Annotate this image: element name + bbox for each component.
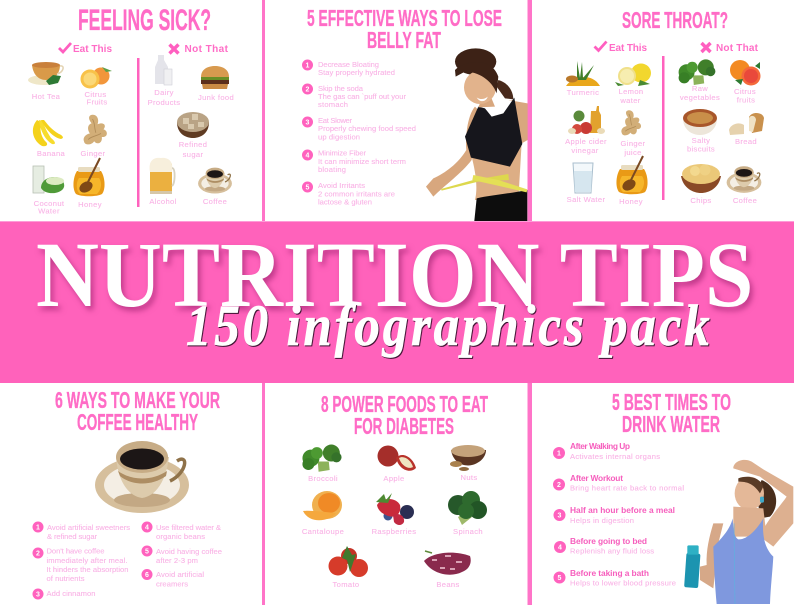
food: raw vegetables: vegetables — [680, 93, 720, 102]
food: alcohol — [149, 158, 177, 206]
list item 5 — [302, 181, 395, 206]
food: citrus fruits — [80, 67, 112, 106]
food: alcohol: Alcohol — [149, 197, 177, 206]
food: honey: Honey — [78, 200, 102, 209]
food: ginger juice: Ginger — [621, 139, 645, 148]
icon: turmeric — [566, 61, 600, 86]
icon: berries — [376, 493, 414, 525]
food: tomato — [328, 546, 368, 589]
icon: apple — [378, 446, 416, 471]
list item 3: Add cinnamon — [46, 589, 96, 598]
list item 2: 2 — [306, 86, 310, 94]
food: banana — [33, 120, 66, 158]
list item 4: Before going to bed — [570, 536, 647, 546]
food: apple — [378, 446, 416, 483]
heading line 1: 5 EFFECTIVE WAYS TO LOSE — [307, 5, 502, 31]
food: broccoli — [302, 445, 342, 483]
list item 5: after 2-3 pm — [156, 556, 198, 565]
food: chips — [681, 164, 721, 205]
panel: belly fat — [265, 0, 530, 222]
food: honey: Honey — [619, 197, 643, 206]
food: salt water — [567, 163, 605, 204]
food: salty biscuits — [683, 109, 717, 154]
list item 2: 2 — [557, 482, 561, 489]
food: salty biscuits: Salty — [692, 136, 710, 145]
icon: bread — [729, 113, 764, 135]
list item 3: up digestion — [318, 132, 360, 142]
list item 3: 3 — [36, 592, 40, 598]
list item 1: 1 — [306, 62, 310, 70]
heading: FEELING SICK? — [78, 4, 211, 37]
list item 1: 1 — [557, 450, 561, 458]
heading line 2: FOR DIABETES — [354, 413, 454, 439]
food: apple: Apple — [383, 474, 405, 483]
list item 3 — [554, 505, 675, 525]
food: nuts — [450, 445, 486, 482]
food: coffee: Coffee — [733, 196, 757, 205]
icon: cantaloupe — [303, 491, 342, 520]
list item 1: Decrease Bloating — [318, 60, 379, 69]
photo: coffee cup on saucer — [95, 441, 189, 513]
list item 1 — [302, 60, 395, 77]
panel: sore throat — [530, 0, 794, 222]
list item 4: It can minimize short term — [318, 157, 406, 166]
list item 1: Avoid artificial sweetners — [47, 523, 130, 532]
list item 3: Helps in digestion — [570, 516, 634, 525]
list item 5: Avoid having coffee — [156, 547, 222, 556]
list item 6 — [142, 569, 204, 588]
heading line 1: 6 WAYS TO MAKE YOUR — [55, 387, 220, 413]
icon: spinach — [448, 491, 487, 525]
list item 2: Bring heart rate back to normal — [570, 484, 684, 492]
panel: coffee healthy — [0, 383, 265, 605]
food: apple cider vinegar: vinegar — [571, 146, 599, 155]
list item 6: Avoid artificial — [156, 570, 204, 579]
icon: honey jar — [616, 156, 648, 194]
heading line 2: BELLY FAT — [367, 27, 441, 53]
icon: tomatoes — [328, 546, 368, 577]
food: citrus fruits — [730, 60, 760, 104]
list item 6: creamers — [156, 580, 188, 588]
heading line 2: DRINK WATER — [622, 411, 720, 437]
list item 2: stomach — [318, 100, 348, 109]
list item 3: Eat Slower — [318, 116, 352, 125]
column heading: not that: Not That — [716, 43, 759, 54]
food: bread: Bread — [735, 137, 757, 146]
icon: grapefruit and orange — [730, 60, 760, 86]
list item 5: Avoid Irritants — [318, 181, 365, 190]
list item 4: 4 — [306, 152, 310, 160]
list item 5 — [554, 568, 676, 588]
food: broccoli: Broccoli — [308, 474, 338, 483]
food: lemon water: Lemon — [619, 87, 643, 96]
list item 4 — [302, 148, 406, 174]
food: beans — [424, 551, 471, 589]
icon: coffee cup — [727, 166, 761, 193]
food: citrus fruits: Fruits — [86, 98, 108, 106]
list item 5: 2 common irritants are — [318, 190, 395, 198]
panel: drink water — [530, 383, 794, 605]
icon: chips bowl — [681, 164, 721, 193]
food: hot tea — [28, 62, 63, 101]
list item 3: 3 — [558, 512, 562, 520]
icon: ginger — [621, 110, 641, 135]
food: refined sugar — [177, 112, 209, 159]
list item 3 — [32, 588, 96, 600]
list item 5 — [142, 546, 222, 565]
list item 4: bloating — [318, 165, 346, 174]
list item 4 — [142, 522, 221, 541]
photo: woman with water bottle — [684, 460, 793, 604]
list item 2: After Workout — [570, 473, 623, 483]
food: citrus fruits: fruits — [737, 96, 755, 104]
list item 3: Properly chewing food speed — [318, 124, 416, 133]
food: coffee — [727, 166, 761, 205]
food: ginger juice: juice — [623, 148, 642, 157]
list item 1: 1 — [36, 524, 40, 532]
food: cantaloupe: Cantaloupe — [302, 527, 344, 536]
food: salty biscuits: biscuits — [687, 144, 715, 154]
food: coconut water — [33, 166, 65, 216]
icon: broccoli — [679, 59, 715, 85]
banner title: nutrition tips: NUTRITION TIPS — [36, 224, 753, 327]
food: bread — [729, 113, 764, 146]
food: junk food — [198, 66, 234, 102]
food: ginger — [81, 115, 107, 158]
list item 2: immediately after meal. — [46, 556, 128, 565]
food: raspberries — [372, 493, 416, 536]
icon: nuts bowl — [450, 445, 486, 471]
food: coconut water: Water — [38, 206, 60, 216]
icon: burger — [201, 66, 229, 89]
list item 6: 6 — [145, 572, 149, 579]
icon: banana — [33, 120, 63, 146]
column heading: eat this — [59, 43, 112, 55]
food: lemon water — [615, 64, 651, 105]
icon: lemons — [615, 64, 651, 86]
list item 4: 4 — [145, 524, 149, 532]
food: spinach: Spinach — [453, 527, 483, 536]
food: coconut water: Coconut — [34, 199, 64, 208]
icon: hot tea — [28, 62, 63, 85]
food: turmeric — [566, 61, 600, 97]
icon: honey jar — [73, 158, 105, 196]
column heading: not that: Not That — [184, 44, 229, 55]
list item 2: of nutrients — [46, 574, 85, 583]
food: honey — [616, 156, 648, 206]
heading line 2: COFFEE HEALTHY — [77, 409, 198, 435]
list item 4: organic beans — [156, 532, 205, 541]
column heading: eat this: Eat This — [73, 44, 112, 55]
food: ginger: Ginger — [81, 149, 106, 158]
photo: woman measuring waist — [426, 48, 528, 221]
icon: bowl — [683, 109, 717, 135]
list item 5: Helps to lower blood pressure — [570, 578, 676, 588]
band edge lines — [0, 221, 794, 222]
food: citrus fruits: Citrus — [85, 90, 106, 99]
food: dairy products: Products — [148, 98, 180, 107]
food: nuts: Nuts — [460, 473, 478, 482]
food: citrus fruits: Citrus — [734, 87, 756, 96]
list item 5: 5 — [558, 575, 562, 582]
list item 3: 3 — [306, 120, 310, 126]
list item 5: Before taking a bath — [570, 568, 649, 578]
food: chips: Chips — [690, 196, 712, 205]
food: refined sugar: sugar — [183, 150, 203, 159]
food: apple cider vinegar — [565, 106, 607, 155]
food: cantaloupe — [302, 491, 344, 536]
food: beans: Beans — [436, 580, 460, 589]
food: refined sugar: Refined — [179, 140, 207, 149]
list item 2: It hinders the absorption — [46, 565, 128, 574]
list item 4: Minimize Fiber — [318, 148, 366, 158]
food: hot tea: Hot Tea — [32, 92, 61, 101]
icon: milk bottle — [155, 55, 172, 85]
food: apple cider vinegar: Apple cider — [565, 137, 607, 146]
food: banana: Banana — [37, 149, 66, 158]
icon: apples and vinegar — [568, 106, 605, 134]
list item 2 — [32, 546, 128, 583]
food: spinach — [448, 491, 487, 536]
column heading: eat this — [594, 42, 647, 54]
list item 1: After Walking Up — [570, 441, 630, 451]
food: ginger juice — [621, 110, 646, 157]
food: lemon water: water — [619, 96, 641, 105]
panel: power foods — [265, 383, 530, 605]
column heading: eat this: Eat This — [609, 43, 647, 54]
list item 5: 5 — [145, 548, 149, 556]
icon: sugar bowl — [177, 112, 209, 138]
list item 1: Activates internal organs — [570, 452, 660, 461]
food: tomato: Tomato — [332, 580, 360, 589]
list item 3 — [302, 116, 416, 142]
icon: ginger — [84, 115, 107, 144]
icon: beer mug — [150, 158, 175, 194]
icon: broccoli — [302, 445, 342, 472]
list item 1: Stay properly hydrated — [318, 68, 395, 77]
icon: coffee cup — [198, 168, 232, 194]
food: honey — [73, 158, 105, 209]
food: dairy products: Dairy — [154, 88, 174, 97]
icon: beans pile — [424, 551, 471, 575]
panel: feeling sick — [0, 0, 265, 222]
list item 3: Half an hour before a meal — [570, 505, 675, 515]
list item 4: 4 — [558, 544, 562, 552]
list item 2: The gas can `puff out your — [318, 92, 406, 101]
food: salt water: Salt Water — [567, 195, 605, 204]
list item 5: 5 — [306, 184, 310, 192]
food: turmeric: Turmeric — [567, 88, 599, 97]
list item 1 — [32, 522, 130, 541]
food: raspberries: Raspberries — [372, 527, 416, 536]
food: dairy products — [148, 55, 180, 107]
food: raw vegetables — [679, 59, 720, 102]
pink band background — [0, 222, 794, 383]
icon: citrus — [80, 67, 112, 88]
list item 2: 2 — [36, 550, 40, 558]
list item 2: Don't have coffee — [46, 546, 104, 556]
list item 1 — [553, 441, 660, 461]
banner subtitle: 150 infographics pack — [186, 293, 710, 358]
list item 2 — [302, 84, 406, 109]
list item 5: lactose & gluten — [318, 198, 372, 206]
food: raw vegetables: Raw — [692, 84, 708, 93]
list item 4 — [554, 536, 654, 556]
icon: glass of water — [573, 163, 593, 193]
list item 1: & refined sugar — [47, 532, 97, 541]
list item 4: Use filtered water & — [156, 523, 221, 532]
list item 2: Skip the soda — [318, 84, 364, 93]
food: coffee: Coffee — [203, 197, 227, 206]
icon: glass and coconut — [33, 166, 64, 193]
heading line 1: 8 POWER FOODS TO EAT — [321, 391, 488, 417]
list item 2 — [553, 473, 684, 492]
food: junk food: Junk food — [198, 93, 234, 102]
food: coffee — [198, 168, 232, 206]
list item 4: Replenish any fluid loss — [570, 546, 654, 556]
